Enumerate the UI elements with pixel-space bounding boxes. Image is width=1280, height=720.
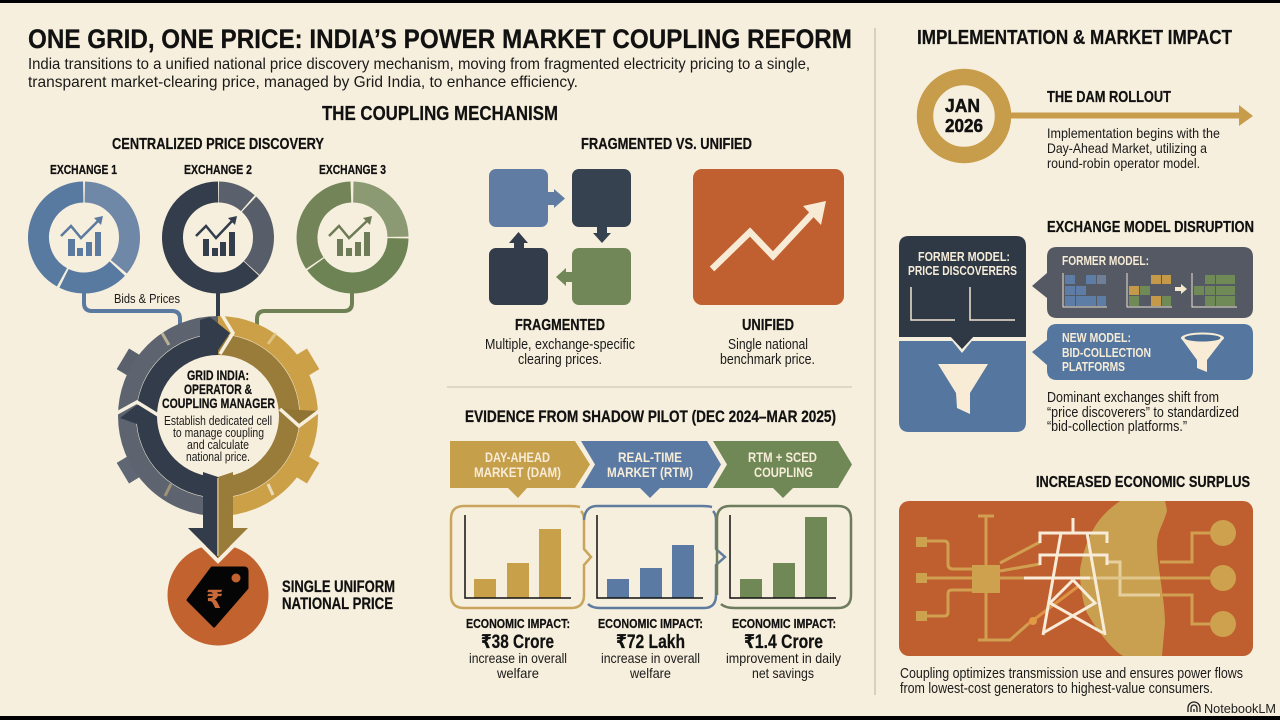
diagram: fragmented squares [489,169,631,305]
badge: jan 2026 [925,77,1003,155]
banner: day-ahead market: DAY-AHEAD [485,449,550,465]
gear: grid india [117,315,319,507]
card: new model bid-collection: NEW MODEL: [1062,330,1131,345]
label: single uniform national price: NATIONAL PRICE [282,595,393,613]
card: former to new model: PRICE DISCOVERERS [908,263,1017,278]
connector: exchange 3 to grid [257,292,352,326]
text: rollout description [1047,125,1220,171]
exchange 2 [154,162,282,302]
stat: day-ahead impact: increase in overall [469,650,567,666]
panel: exchange model disruption [899,219,1254,435]
banner: rtm + sced coupling: RTM + SCED [748,449,817,465]
card: former model mini charts: FORMER MODEL: [1062,253,1149,268]
arrow: timeline [1005,105,1253,126]
text: rollout description: Implementation begins with the [1047,125,1220,141]
card: new model bid-collection: BID-COLLECTION [1062,345,1151,360]
gear description: national price. [186,449,250,464]
gear description: and calculate [187,437,249,452]
stat: day-ahead impact: ₹38 Crore [481,632,554,653]
stat: day-ahead impact [466,616,570,681]
text: rollout description: round-robin operator model. [1047,155,1200,171]
heading: fragmented vs unified: FRAGMENTED VS. UNIFIED [581,136,752,153]
panel: centralized price discovery [20,136,416,646]
stat: real-time impact: welfare [629,665,671,681]
diagram: unified price chart [693,169,844,305]
icon: price tag [188,568,247,626]
output price circle [168,544,268,646]
label: single uniform national price: SINGLE UNIFORM [282,578,395,596]
banner: real-time market: MARKET (RTM) [607,464,693,480]
label: unified [720,317,815,368]
stat: real-time impact: ECONOMIC IMPACT: [598,616,703,631]
arrow: to national price [188,472,248,561]
label: unified: Single national [728,337,808,353]
panel: dam rollout [925,77,1253,171]
card: new model bid-collection: PLATFORMS [1062,359,1125,374]
text: rollout description: Day-Ahead Market, utilizing a [1047,140,1207,156]
stat: real-time impact [598,616,703,681]
card: new model bid-collection [1032,324,1253,380]
gear description: Establish dedicated cell [164,413,272,428]
badge: jan 2026: 2026 [945,115,983,136]
banner: day-ahead market: MARKET (DAM) [474,464,561,480]
gear description: to manage coupling [173,425,264,440]
heading: evidence: EVIDENCE FROM SHADOW PILOT (DEC 2024–MAR 2025) [465,408,836,426]
label: fragmented: FRAGMENTED [515,317,605,334]
chart: day-ahead market [451,506,591,608]
exchange 3 [289,162,416,301]
heading: implementation and market impact: IMPLEMENTATION & MARKET IMPACT [917,27,1232,49]
panel: evidence from shadow pilot [450,408,852,681]
subtitle: India transitions to a unified national price discovery mechanism, moving from fragmented electricity pricing to a single, [28,56,810,73]
label: bids and prices: Bids & Prices [114,292,180,306]
illustration: transmission network [899,501,1253,656]
stat: coupling impact [726,616,841,681]
banner: rtm + sced coupling: COUPLING [754,464,813,480]
heading: the dam rollout: THE DAM ROLLOUT [1047,89,1171,106]
connector: exchange 1 to grid [84,292,180,326]
stat: real-time impact: ₹72 Lakh [616,632,685,653]
gear heading: OPERATOR & [184,381,252,397]
exchange 2: EXCHANGE 2 [184,162,252,177]
banner: day-ahead market [450,441,590,498]
panel: fragmented vs unified [485,136,844,368]
gear heading [162,367,275,411]
badge: jan 2026: JAN [945,95,980,116]
stat: day-ahead impact: welfare [496,665,539,681]
card: former to new model [899,236,1026,432]
exchange 3: EXCHANGE 3 [319,162,386,177]
label: fragmented: Multiple, exchange-specific [485,337,635,353]
text: disruption description [1047,389,1239,435]
text: disruption description: “price discoverers” to standardized [1047,404,1239,421]
chart: rtm + sced coupling [717,506,851,608]
gear heading: GRID INDIA: [187,367,249,383]
banner: rtm + sced coupling [713,441,852,498]
banner: real-time market [581,441,721,498]
text: disruption description: “bid-collection platforms.” [1047,418,1187,435]
heading: the coupling mechanism: THE COUPLING MECHANISM [322,103,558,125]
banner: real-time market: REAL-TIME [618,449,682,465]
label: unified: UNIFIED [742,317,794,334]
card: former to new model: FORMER MODEL: [918,249,1010,264]
center circle [157,355,279,477]
stat: coupling impact: improvement in daily [726,650,841,666]
stat: coupling impact: ECONOMIC IMPACT: [732,616,836,631]
exchange 1 [20,162,148,302]
label: fragmented [485,317,635,368]
chart: real-time market [584,506,725,608]
stat: coupling impact: net savings [752,665,814,681]
notebooklm watermark: NotebookLM [1204,701,1276,716]
label: single uniform national price [282,578,395,613]
stat: day-ahead impact: ECONOMIC IMPACT: [466,616,570,631]
exchange 1: EXCHANGE 1 [50,162,117,177]
subtitle [28,56,810,91]
icon: transmission tower [1024,518,1107,635]
label: fragmented: clearing prices. [518,352,602,368]
icon: price tag: ₹ [206,585,223,614]
text: surplus description [900,665,1243,697]
stat: coupling impact: ₹1.4 Crore [744,632,823,653]
card: former model mini charts [1032,247,1253,318]
stat: real-time impact: increase in overall [601,650,700,666]
label: unified: benchmark price. [720,352,815,368]
gear description [164,413,272,464]
panel: increased economic surplus [899,474,1253,697]
gear heading: COUPLING MANAGER [162,395,275,411]
text: surplus description: from lowest-cost generators to highest-value consumers. [900,680,1213,697]
text: disruption description: Dominant exchanges shift from [1047,389,1219,406]
subtitle: transparent market-clearing price, managed by Grid India, to enhance efficiency. [28,74,578,91]
title: ONE GRID, ONE PRICE: INDIA’S POWER MARKET COUPLING REFORM [28,24,852,54]
heading: centralized price discovery: CENTRALIZED PRICE DISCOVERY [112,136,324,153]
connector: exchange 2 to grid [216,292,220,322]
